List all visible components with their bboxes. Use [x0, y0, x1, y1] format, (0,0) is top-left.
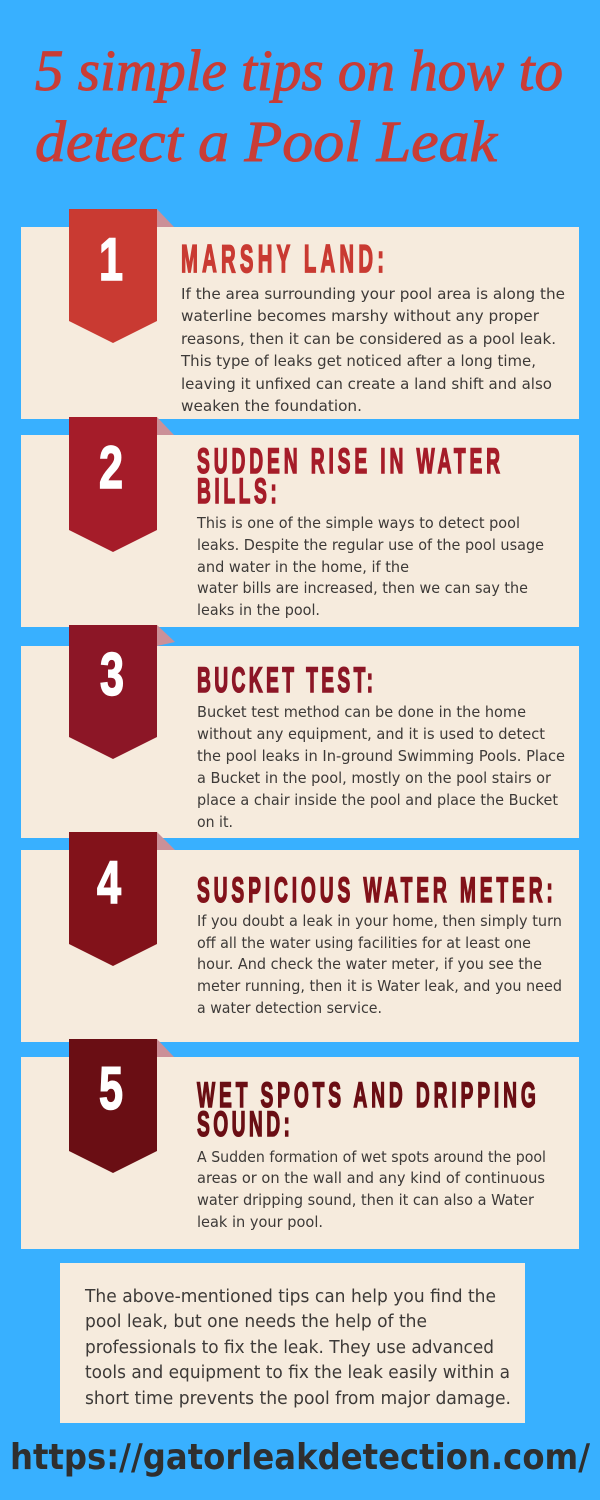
- text: tip 4 body: meter running, then it is Water leak, and you need: [197, 977, 562, 995]
- text: closing note body: short time prevents the pool from major damage.: [85, 1388, 511, 1409]
- text: tip 3 body: place a chair inside the pool and place the Bucket: [197, 791, 558, 809]
- title: 5 simple tips on how to: [35, 38, 563, 103]
- heading: marshy land: MARSHY LAND:: [181, 237, 384, 281]
- text: tip 5 body: water dripping sound, then it can also a Water: [197, 1191, 535, 1209]
- text: closing note body: tools and equipment to fix the leak easily within a: [85, 1362, 510, 1383]
- text: tip 4 body: off all the water using facilities for at least one: [197, 934, 531, 952]
- icon: ribbon number 4: [69, 832, 175, 966]
- text: tip 5 body: areas or on the wall and any kind of continuous: [197, 1169, 545, 1187]
- text: tip 2 body: and water in the home, if the: [197, 558, 409, 576]
- panel: tip 3 bucket test: [21, 625, 579, 838]
- panel: tip 5 wet spots and dripping sound: [21, 1039, 579, 1249]
- text: tip 2 body: leaks in the pool.: [197, 601, 320, 619]
- heading: suspicious water meter: SUSPICIOUS WATER METER:: [197, 870, 553, 909]
- heading: wet spots and dripping sound: WET SPOTS AND DRIPPING: [197, 1075, 536, 1114]
- text: tip 3 body: Bucket test method can be done in the home: [197, 703, 526, 721]
- text: tip 5 body: leak in your pool.: [197, 1213, 323, 1231]
- heading: sudden rise in water bills: BILLS:: [197, 471, 277, 510]
- title: detect a Pool Leak: [35, 109, 498, 174]
- icon: ribbon number 5: 5: [99, 1056, 123, 1123]
- panel: tip 1 marshy land: [21, 209, 579, 419]
- text: tip 4 body: [197, 912, 562, 1017]
- text: tip 1 body: If the area surrounding your pool area is along the: [181, 285, 565, 303]
- heading: wet spots and dripping sound: SOUND:: [197, 1104, 290, 1143]
- text: closing note body: The above-mentioned tips can help you find the: [84, 1286, 496, 1307]
- text: tip 4 body: If you doubt a leak in your home, then simply turn: [197, 912, 562, 930]
- panel: tip 4 suspicious water meter: [21, 832, 579, 1042]
- title: [35, 38, 563, 174]
- icon: ribbon number 2: [69, 417, 174, 552]
- icon: ribbon number 4: 4: [97, 850, 121, 917]
- text: tip 3 body: without any equipment, and it is used to detect: [197, 725, 545, 743]
- text: tip 3 body: [197, 703, 565, 831]
- text: tip 3 body: a Bucket in the pool, mostly on the pool stairs or: [197, 769, 552, 787]
- text: closing note body: [84, 1286, 511, 1409]
- text: tip 2 body: leaks. Despite the regular use of the pool usage: [197, 536, 544, 554]
- heading: wet spots and dripping sound: [197, 1075, 536, 1143]
- text: tip 1 body: waterline becomes marshy without any proper: [181, 307, 540, 325]
- text: tip 1 body: reasons, then it can be considered as a pool leak.: [181, 330, 556, 348]
- text: tip 2 body: This is one of the simple ways to detect pool: [196, 514, 520, 532]
- icon: ribbon number 3: 3: [100, 642, 124, 709]
- text: tip 3 body: on it.: [197, 813, 233, 831]
- icon: ribbon number 3: [69, 625, 175, 759]
- heading: sudden rise in water bills: [197, 441, 500, 510]
- panel: closing note: [60, 1263, 525, 1423]
- text: tip 2 body: water bills are increased, then we can say the: [197, 579, 528, 597]
- text: tip 5 body: [197, 1148, 546, 1231]
- icon: ribbon number 1: 1: [99, 227, 123, 294]
- text: tip 1 body: leaving it unfixed can create a land shift and also: [181, 375, 552, 393]
- text: tip 5 body: A Sudden formation of wet spots around the pool: [197, 1148, 546, 1166]
- icon: ribbon number 2: 2: [99, 435, 123, 502]
- text: tip 3 body: the pool leaks in In-ground Swimming Pools. Place: [197, 747, 565, 765]
- icon: ribbon number 5: [69, 1039, 174, 1173]
- text: tip 1 body: [180, 285, 565, 415]
- text: tip 1 body: weaken the foundation.: [181, 397, 362, 415]
- text: closing note body: professionals to fix the leak. They use advanced: [85, 1337, 494, 1358]
- text: tip 4 body: hour. And check the water meter, if you see the: [197, 955, 542, 973]
- panel: tip 2 sudden rise in water bills: [21, 417, 579, 627]
- text: tip 2 body: [196, 514, 544, 619]
- heading: bucket test: BUCKET TEST:: [197, 660, 373, 699]
- text: tip 1 body: This type of leaks get noticed after a long time,: [180, 352, 536, 370]
- text: tip 4 body: a water detection service.: [197, 999, 382, 1017]
- heading: sudden rise in water bills: SUDDEN RISE IN WATER: [197, 441, 500, 480]
- text: closing note body: pool leak, but one needs the help of the: [85, 1311, 427, 1332]
- icon: ribbon number 1: [69, 209, 174, 343]
